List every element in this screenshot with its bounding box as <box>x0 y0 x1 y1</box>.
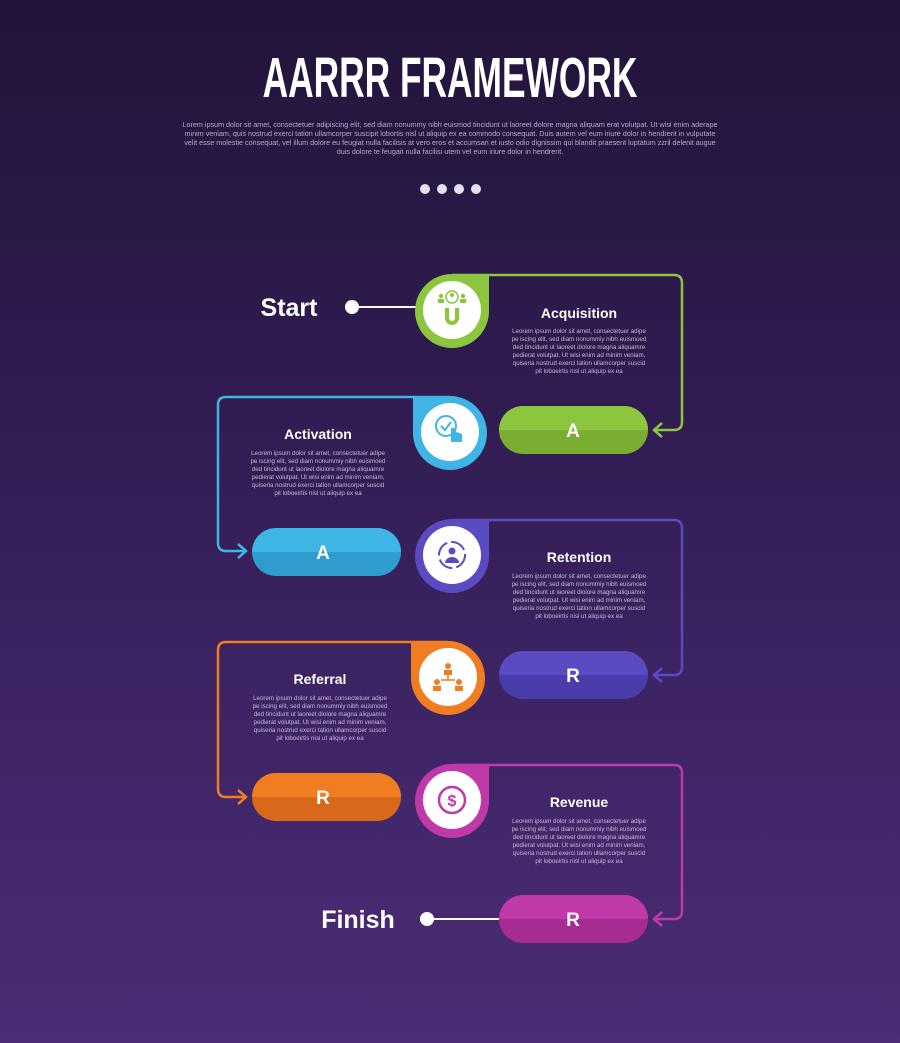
step: acquisition <box>415 274 682 454</box>
step: revenue: ded tincidunt ut laoreet diolore magna aliquamre <box>513 834 646 841</box>
step: activation: Activation <box>284 426 352 442</box>
icon: magnet users <box>438 291 466 325</box>
step: revenue: pit loboeirtis nisl ut aliquip ex ea <box>535 858 623 865</box>
step: acquisition: pe iscing elit, sed diam nonummiy nibh euismoed <box>512 336 647 343</box>
step: retention <box>415 519 682 699</box>
finish label: Finish <box>321 906 395 934</box>
step: activation: quiseria nostrud exerci tation ullamcorper suscid <box>252 482 385 489</box>
step: acquisition: Leorem ipsum dolor sit amet, consectetuer adipe <box>512 328 646 335</box>
icon: coin: $ <box>448 793 457 810</box>
icon: check hand <box>436 416 462 442</box>
intro paragraph: velit esse molestie consequat, vel illum dolore eu feugiat nulla facilisis at vero eros et accumsan et iusto odio dignissim qui blandit praesent luptatum zzril delenit augue <box>184 138 716 147</box>
step: retention: R <box>566 666 580 687</box>
intro paragraph <box>183 120 717 156</box>
intro paragraph: duis dolore te feugait nulla facilisi utem vel eum iriure dolor in hendrerit. <box>337 147 563 156</box>
intro paragraph: minim veniam, quis nostrud exerci tation ullamcorper suscipit lobortis nisl ut aliquip ex ea commodo consequat. Duis autem vel eum iriure dolor in hendrerit in vulputate <box>185 129 715 138</box>
step: activation <box>218 396 487 576</box>
step: activation: pe iscing elit, sed diam nonummiy nibh euismoed <box>251 458 386 465</box>
title: AARRR FRAMEWORK <box>263 47 637 110</box>
step: referral: pe iscing elit, sed diam nonummiy nibh euismoed <box>253 703 388 710</box>
step: retention: Leorem ipsum dolor sit amet, consectetuer adipe <box>512 573 646 580</box>
step: referral: R <box>316 788 330 809</box>
dots <box>420 184 481 194</box>
step: revenue: pe iscing elit, sed diam nonummiy nibh euismoed <box>512 826 647 833</box>
step: referral: Leorem ipsum dolor sit amet, consectetuer adipe <box>253 695 387 702</box>
step: acquisition: A <box>566 421 580 442</box>
step: acquisition: pit loboeirtis nisl ut aliquip ex ea <box>535 368 623 375</box>
step: referral: pit loboeirtis nisl ut aliquip ex ea <box>276 735 364 742</box>
icon: referral network <box>433 663 463 691</box>
step: referral: pedierat volutpat. Ut wisi enim ad minim veniam, <box>254 719 387 726</box>
step: revenue: R <box>566 910 580 931</box>
step: retention: pit loboeirtis nisl ut aliquip ex ea <box>535 613 623 620</box>
step: retention: pe iscing elit, sed diam nonummiy nibh euismoed <box>512 581 647 588</box>
step: referral <box>218 641 485 821</box>
step: revenue <box>415 764 682 943</box>
step: activation: pit loboeirtis nisl ut aliquip ex ea <box>274 490 362 497</box>
step: activation: Leorem ipsum dolor sit amet, consectetuer adipe <box>251 450 385 457</box>
step: activation: A <box>316 543 330 564</box>
step: revenue: Leorem ipsum dolor sit amet, consectetuer adipe <box>512 818 646 825</box>
step: acquisition: pedierat volutpat. Ut wisi enim ad minim veniam, <box>513 352 646 359</box>
step: retention: Retention <box>547 549 611 565</box>
step: activation: pedierat volutpat. Ut wisi enim ad minim veniam, <box>252 474 385 481</box>
step: retention: pedierat volutpat. Ut wisi enim ad minim veniam, <box>513 597 646 604</box>
step: revenue: quiseria nostrud exerci tation ullamcorper suscid <box>513 850 646 857</box>
step: referral: ded tincidunt ut laoreet diolore magna aliquamre <box>254 711 387 718</box>
step: acquisition: quiseria nostrud exerci tation ullamcorper suscid <box>513 360 646 367</box>
intro paragraph: Lorem ipsum dolor sit amet, consectetuer adipiscing elit, sed diam nonummy nibh euismod tincidunt ut laoreet dolore magna aliquam erat volutpat. Ut wisi enim aderape <box>183 120 717 129</box>
step: retention: ded tincidunt ut laoreet diolore magna aliquamre <box>513 589 646 596</box>
step: retention: quiseria nostrud exerci tation ullamcorper suscid <box>513 605 646 612</box>
step: revenue: Revenue <box>550 794 608 810</box>
icon: retention cycle <box>439 542 465 568</box>
icon: coin <box>439 787 465 813</box>
step: referral: Referral <box>294 671 346 687</box>
step: acquisition: Acquisition <box>541 305 617 321</box>
step: revenue: pedierat volutpat. Ut wisi enim ad minim veniam, <box>513 842 646 849</box>
finish label <box>321 906 499 934</box>
start label: Start <box>261 294 318 322</box>
step: acquisition: ded tincidunt ut laoreet diolore magna aliquamre <box>513 344 646 351</box>
step: referral: quiseria nostrud exerci tation ullamcorper suscid <box>254 727 387 734</box>
start label <box>261 294 418 322</box>
step: activation: ded tincidunt ut laoreet diolore magna aliquamre <box>252 466 385 473</box>
